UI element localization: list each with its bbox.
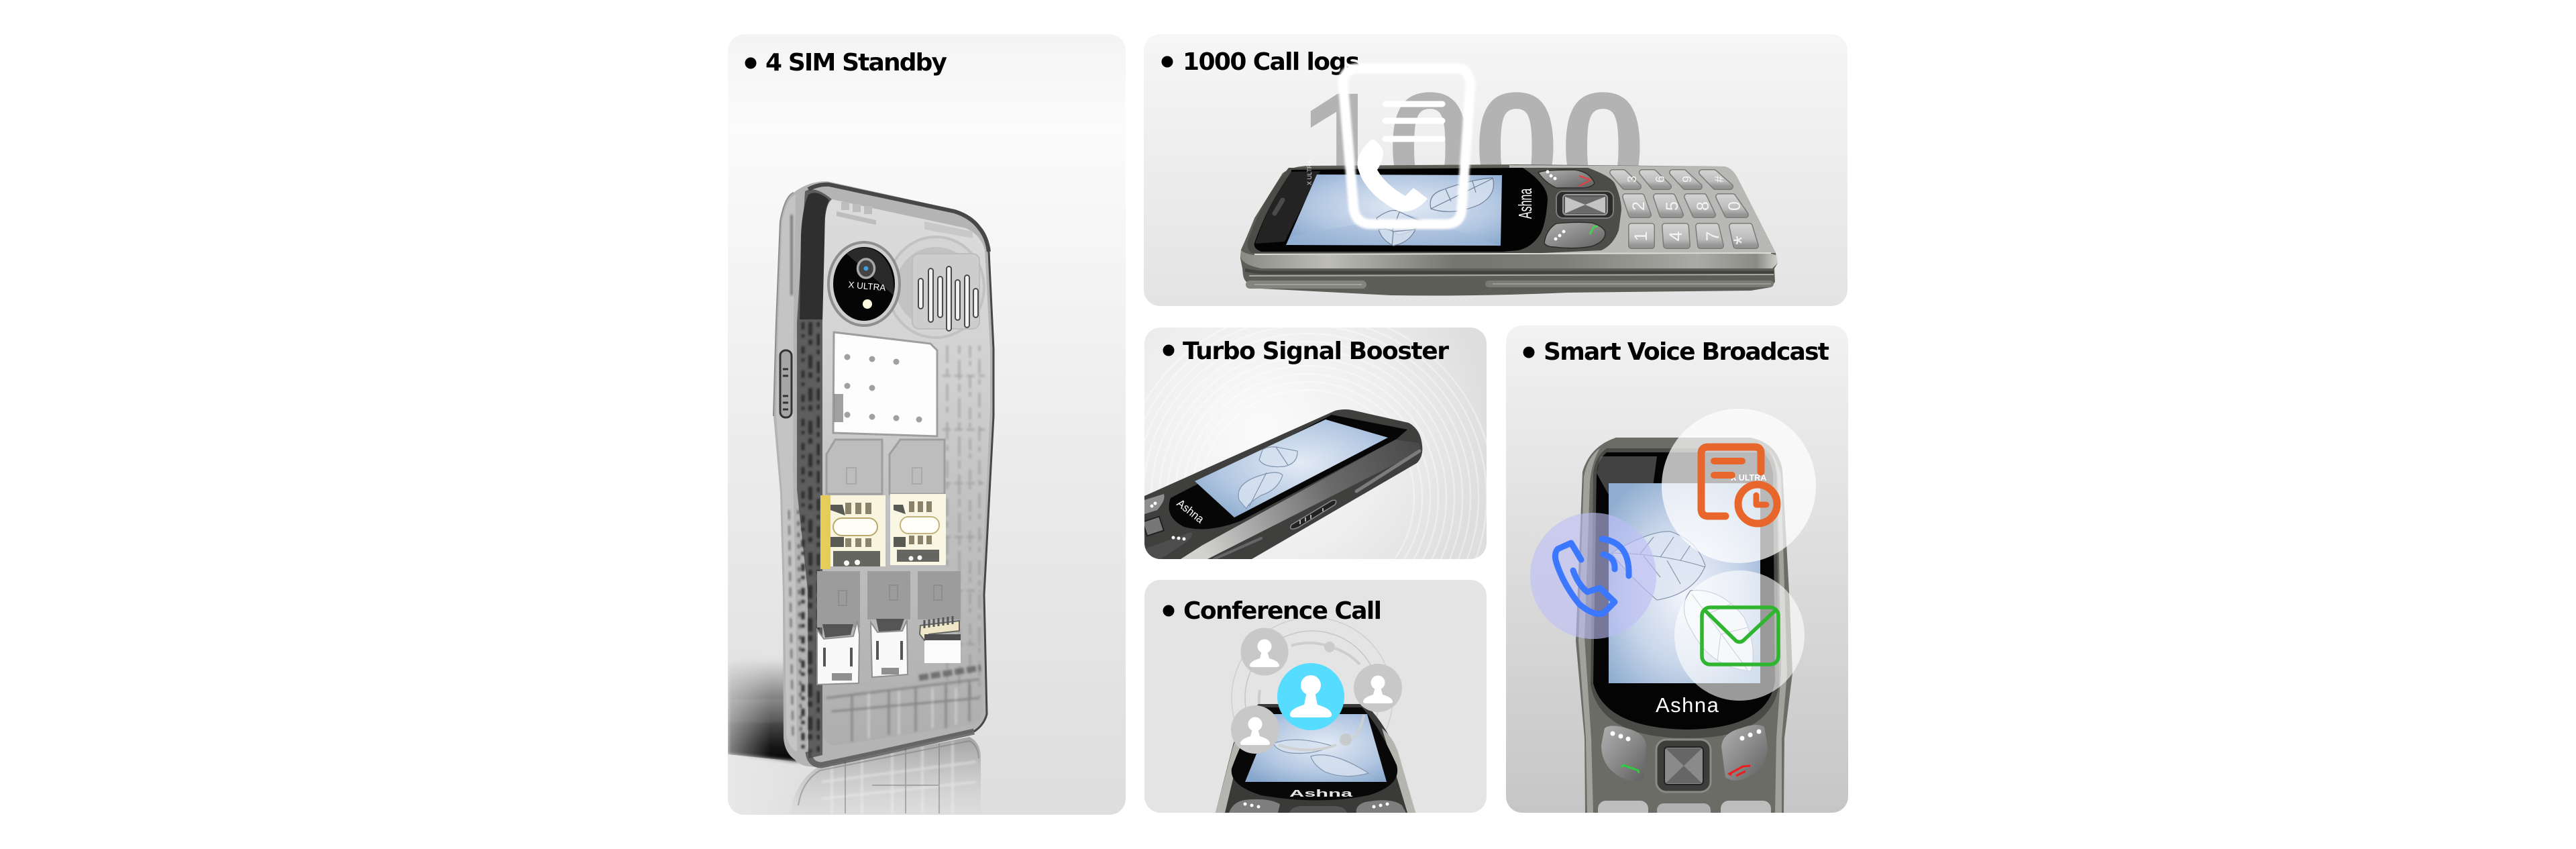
body bbox=[1144, 409, 1422, 559]
phone front top bbox=[1216, 704, 1415, 813]
orbit on top of phone bbox=[1279, 642, 1364, 750]
keypad: 8 bbox=[1694, 201, 1713, 211]
keypad: 0 bbox=[1725, 201, 1744, 211]
keypad: 6 bbox=[1654, 176, 1667, 183]
speaker grille bbox=[888, 237, 984, 338]
panel: Smart Voice Broadcast bbox=[1506, 326, 1848, 821]
black bezel bbox=[1254, 168, 1548, 252]
phone front bbox=[1576, 438, 1792, 821]
screen bbox=[1286, 174, 1502, 246]
panel: Turbo Signal Booster bbox=[1119, 309, 1495, 685]
keypad: * bbox=[1729, 236, 1755, 245]
brand: Ashna bbox=[1289, 788, 1353, 799]
panel: Conference Call bbox=[1144, 580, 1487, 813]
screen leaves bbox=[1238, 447, 1297, 509]
memory card slot bbox=[920, 616, 961, 663]
panel: 1000 Call logs bbox=[1144, 34, 1847, 306]
brand: Ashna bbox=[1174, 497, 1207, 526]
body bbox=[1576, 438, 1792, 813]
keypad: 7 bbox=[1703, 231, 1723, 242]
heading: 1000 Call logs: 1000 Call logs bbox=[1183, 48, 1360, 76]
keypad: 3 bbox=[1625, 176, 1639, 183]
phone landscape bbox=[1240, 160, 1778, 295]
camera module bbox=[828, 242, 900, 326]
circuit lower section bbox=[826, 668, 981, 742]
side button bbox=[780, 350, 792, 417]
left softkey bbox=[1601, 726, 1646, 781]
heading: Smart Voice Broadcast: Smart Voice Broadcast bbox=[1544, 338, 1829, 366]
SIM tray 4 bbox=[871, 619, 908, 677]
SIM tray 2 gold bbox=[890, 494, 946, 565]
body dark edge bbox=[773, 185, 994, 765]
keypad top row bbox=[1598, 801, 1771, 821]
screen bbox=[1609, 483, 1760, 683]
contact avatar centre blue bbox=[1277, 663, 1344, 730]
translucent circle: call history bbox=[1662, 409, 1816, 563]
big number 1000: 1000 bbox=[1300, 60, 1646, 233]
model label: X ULTRA bbox=[1731, 473, 1766, 483]
side grooves bbox=[1356, 451, 1419, 491]
signal rings bbox=[1119, 309, 1495, 685]
phone angled bbox=[1142, 409, 1422, 559]
icon: call history bbox=[1701, 447, 1777, 523]
keypad: 5 bbox=[1663, 201, 1682, 211]
screen leaves bbox=[1611, 532, 1753, 671]
transparent phone bbox=[773, 181, 994, 767]
heading: 4 SIM Standby: 4 SIM Standby bbox=[765, 49, 947, 77]
dark edge band bbox=[797, 189, 832, 758]
brand: Ashna bbox=[1656, 693, 1719, 717]
floor shadow bbox=[728, 662, 799, 815]
earpiece bbox=[1275, 200, 1283, 213]
phone reflection bbox=[790, 737, 981, 813]
white shield plate bbox=[833, 332, 937, 436]
navigation key bbox=[1656, 740, 1711, 792]
contact avatar right bbox=[1354, 664, 1402, 712]
translucent circle: call bbox=[1530, 513, 1656, 639]
heading: Conference Call: Conference Call bbox=[1183, 597, 1382, 625]
navigation key bbox=[1556, 191, 1613, 218]
softkeys and nav fragments bbox=[1142, 494, 1192, 559]
keypad: 1 bbox=[1631, 231, 1651, 242]
top connector bbox=[837, 202, 973, 238]
screen leaves bbox=[1273, 740, 1368, 777]
SIM tray 1 gold bbox=[820, 495, 885, 569]
screen leaves bbox=[1377, 178, 1493, 246]
contact avatar top-left bbox=[1241, 628, 1288, 675]
contact avatar bottom-left bbox=[1231, 705, 1279, 754]
front face bbox=[822, 199, 990, 746]
dark frame bbox=[1248, 168, 1621, 253]
icon: call log document bbox=[1343, 68, 1470, 224]
black bezel bbox=[1169, 415, 1407, 529]
body bbox=[1240, 164, 1778, 295]
key deck bbox=[1509, 165, 1776, 254]
icon: voice call bbox=[1555, 539, 1629, 614]
keypad: # bbox=[1713, 176, 1726, 183]
upper softkey bbox=[1538, 170, 1595, 188]
brand: Ashna bbox=[1514, 189, 1536, 219]
icon: message envelope bbox=[1702, 607, 1778, 664]
body outer bbox=[773, 181, 994, 767]
heading: Turbo Signal Booster: Turbo Signal Booster bbox=[1183, 338, 1449, 365]
side switch bbox=[1291, 500, 1336, 529]
keys bbox=[1229, 799, 1406, 813]
keypad bbox=[1613, 172, 1756, 246]
black bezel bbox=[1593, 452, 1775, 730]
keypad: 2 bbox=[1629, 201, 1648, 211]
SIM slot backs bbox=[817, 440, 961, 628]
lower softkey bbox=[1544, 222, 1605, 248]
side stripes bbox=[1241, 250, 1778, 289]
keypad: 9 bbox=[1680, 176, 1694, 183]
model label: X ULTRA bbox=[1306, 160, 1313, 185]
circuit noise: left bbox=[789, 215, 818, 752]
black bezel bbox=[1232, 707, 1397, 800]
camera module: X ULTRA bbox=[848, 280, 886, 293]
keypad: 4 bbox=[1666, 231, 1686, 242]
SIM tray 3 bbox=[817, 621, 859, 685]
orbit rings bbox=[1232, 617, 1393, 779]
dark frame bbox=[1591, 448, 1779, 738]
right softkey bbox=[1721, 725, 1768, 781]
silver side band bbox=[1181, 440, 1421, 559]
panel: 4 SIM Standby bbox=[728, 34, 1126, 815]
screen bbox=[1245, 714, 1387, 782]
translucent circle: message bbox=[1674, 570, 1805, 701]
left translucent strip bbox=[776, 195, 797, 752]
screen bbox=[1195, 419, 1388, 517]
circuit noise: right bbox=[943, 346, 985, 698]
